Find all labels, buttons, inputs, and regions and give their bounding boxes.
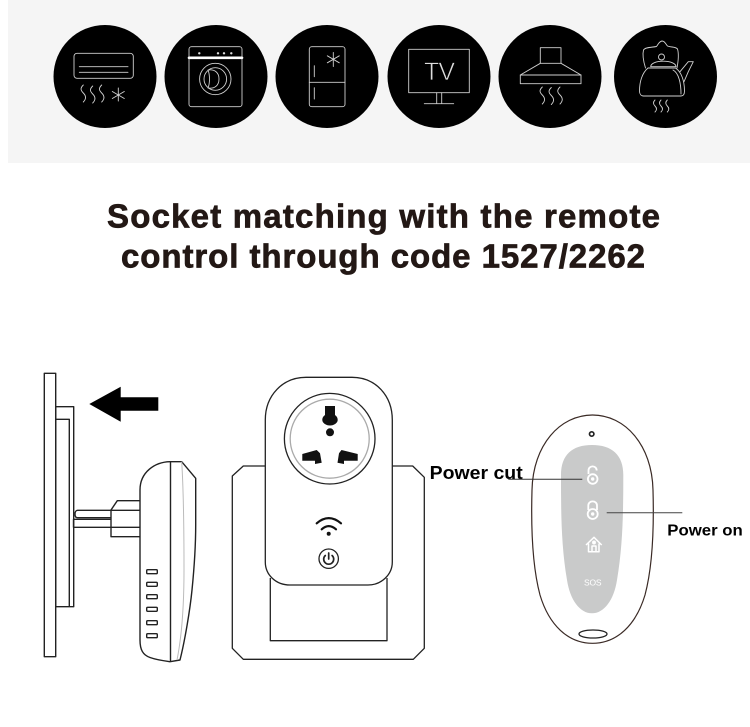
illustration: front view of socket [232,377,424,659]
panel: appliance icon strip [8,0,750,163]
button panel [561,445,623,613]
socket side body [140,462,196,662]
icon: television: TV [424,58,455,86]
icon: range hood [498,25,602,128]
plug pins [74,510,111,527]
illustration: remote control [532,415,653,643]
callout: power on: Power on [667,523,743,540]
icon: unlocked padlock [588,466,598,484]
indicator light [590,432,594,436]
title [107,198,660,274]
arrow: insertion direction [89,387,158,422]
icon: television [388,25,490,128]
callout: power cut: Power cut [430,463,523,483]
icon: power button [319,549,338,568]
icon: locked padlock [588,501,598,519]
plug base [270,578,387,641]
icon: washing machine [164,25,268,128]
socket body [265,377,392,585]
icon: wifi [317,518,341,536]
wall outlet side [56,407,74,607]
socket face [284,393,375,484]
back plate [232,466,424,659]
icon: kettle [614,25,717,128]
icon: refrigerator [276,25,378,128]
wall plate [44,373,56,657]
remote body [532,415,653,643]
title: Socket matching with the remote [107,198,660,234]
title: control through code 1527/2262 [121,238,645,274]
icon: home [586,537,602,552]
callout: power on [607,513,743,540]
illustration: side view of wall plate and socket [44,373,196,662]
key ring hole [579,630,607,638]
icon: air conditioner [54,25,156,128]
plug head [111,501,140,537]
label: SOS: SOS [584,578,602,588]
